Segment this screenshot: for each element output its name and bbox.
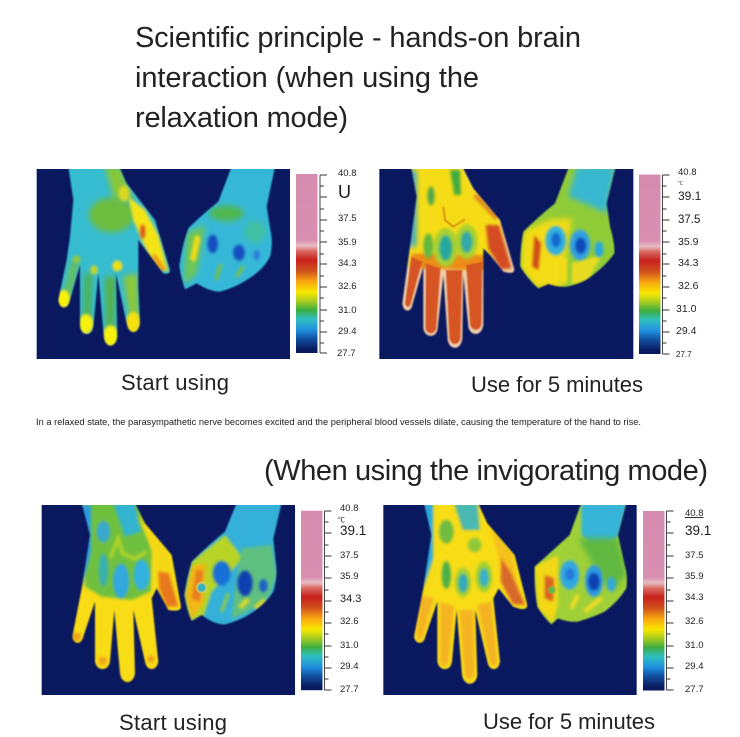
colour scale: invigorating start: 29.4 <box>340 661 358 672</box>
colour scale: invigorating five minutes: 29.4 <box>685 661 704 672</box>
colour scale: relaxation five minutes: 31.0 <box>676 303 697 315</box>
colour scale: relaxation start: 35.9 <box>338 237 356 248</box>
colour scale: relaxation start: 34.3 <box>338 258 356 269</box>
colour scale: relaxation five minutes: 32.6 <box>678 280 699 292</box>
colour scale: relaxation start: U <box>338 182 351 202</box>
colour scale: invigorating start <box>301 503 366 695</box>
colour scale: invigorating start: 39.1 <box>340 523 366 538</box>
thermal image: invigorating mode, start using <box>42 502 295 695</box>
thermal image: invigorating mode, after 5 minutes <box>383 502 637 695</box>
heading: invigorating mode: (When using the invigorating mode) <box>264 455 708 487</box>
thermal image: relaxation mode, start using <box>37 167 290 359</box>
colour scale: invigorating five minutes: 34.3 <box>685 592 704 603</box>
colour scale: relaxation start <box>296 168 356 359</box>
colour scale: invigorating start: 40.8 <box>340 503 358 514</box>
colour scale: relaxation start: 29.4 <box>338 326 356 337</box>
colour scale: invigorating start: 34.3 <box>340 593 361 605</box>
colour scale: relaxation start: 40.8 <box>338 168 356 179</box>
colour scale: relaxation five minutes: 29.4 <box>676 325 697 337</box>
colour scale: relaxation five minutes <box>639 167 702 359</box>
colour scale: invigorating five minutes: 27.7 <box>685 684 704 695</box>
colour scale: relaxation five minutes: 39.1 <box>678 189 702 203</box>
colour scale: relaxation start: 32.6 <box>338 281 356 292</box>
caption: use for 5 minutes (invigorating): Use for 5 minutes <box>483 709 655 734</box>
colour scale: invigorating five minutes: 37.5 <box>685 550 704 561</box>
title: interaction (when using the <box>135 62 479 94</box>
title: relaxation mode) <box>135 102 348 134</box>
caption: use for 5 minutes: Use for 5 minutes <box>471 372 643 397</box>
colour scale: relaxation five minutes: 37.5 <box>678 214 700 226</box>
colour scale: relaxation five minutes: 27.7 <box>676 350 692 359</box>
colour scale: invigorating five minutes: 35.9 <box>685 571 704 582</box>
colour scale: relaxation start: 37.5 <box>338 213 356 224</box>
colour scale: relaxation five minutes: 34.3 <box>678 257 699 269</box>
colour scale: invigorating five minutes: 39.1 <box>685 523 711 538</box>
colour scale: relaxation five minutes: 35.9 <box>678 236 699 248</box>
colour scale: invigorating start: 32.6 <box>340 616 358 627</box>
caption: start using: Start using <box>121 370 229 395</box>
thermal image: relaxation mode, after 5 minutes <box>379 167 633 359</box>
colour scale: invigorating start: 35.9 <box>340 571 358 582</box>
colour scale: invigorating start: 31.0 <box>340 640 358 651</box>
colour scale: invigorating five minutes: 31.0 <box>685 640 704 651</box>
colour scale: relaxation five minutes: 40.8 <box>678 167 696 178</box>
explanation text: In a relaxed state, the parasympathetic nerve becomes excited and the peripheral blood vessels dilate, causing the temperature of the hand to rise. <box>36 417 641 428</box>
colour scale: invigorating five minutes <box>643 508 711 695</box>
title: Scientific principle - hands-on brain <box>135 22 581 54</box>
colour scale: relaxation start: 31.0 <box>338 305 356 316</box>
title <box>135 22 581 134</box>
caption: start using (invigorating): Start using <box>119 710 227 735</box>
colour scale: relaxation start: 27.7 <box>337 348 356 359</box>
colour scale: invigorating start: ℃ <box>338 516 345 524</box>
colour scale: invigorating start: 27.7 <box>340 684 358 695</box>
colour scale: invigorating five minutes: 32.6 <box>685 616 704 627</box>
colour scale: invigorating five minutes: 40.8 <box>685 508 704 519</box>
colour scale: invigorating start: 37.5 <box>340 550 358 561</box>
colour scale: relaxation five minutes: ℃ <box>678 181 683 187</box>
